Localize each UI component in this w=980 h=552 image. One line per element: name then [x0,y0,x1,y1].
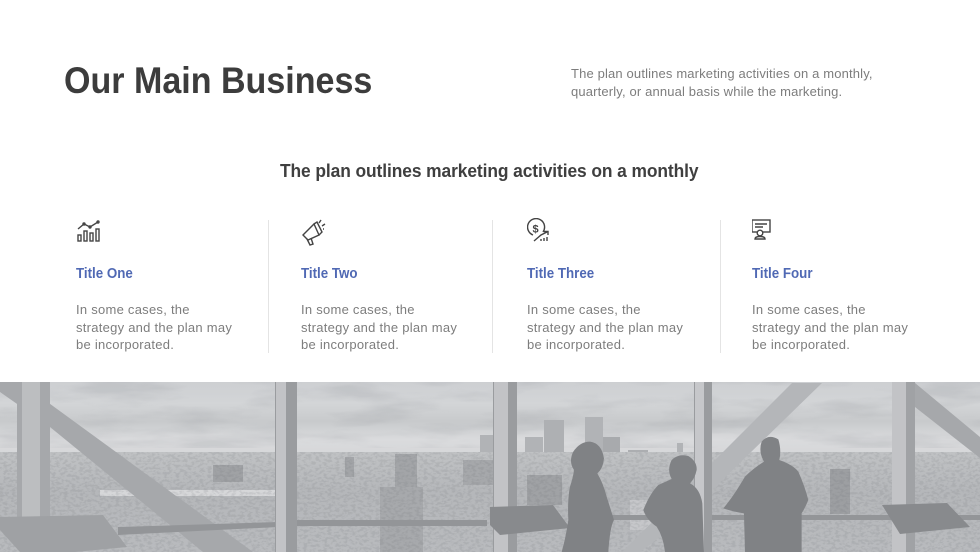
description: title three: strategy and the plan may [527,320,683,334]
man [723,437,808,552]
heading: title four: Title Four [752,266,813,282]
heading: title two: Title Two [301,266,358,282]
description: title one: In some cases, the [76,302,190,317]
description: title four: In some cases, the [752,302,866,317]
kiosk table right [882,503,970,534]
heading: title three: Title Three [527,266,594,282]
description: title three: be incorporated. [527,337,625,352]
icon: megaphone [302,220,326,246]
sky [0,382,980,454]
left diagonal beam [0,382,253,552]
panel: title three [527,218,683,352]
description: title two: In some cases, the [301,302,415,317]
icon: dollar growth: $ [532,224,539,236]
description: title one: be incorporated. [76,337,174,352]
icon: dollar growth [527,218,549,242]
intro text [571,66,873,98]
right diagonal beam [622,383,822,552]
subheading: The plan outlines marketing activities on a monthly [280,160,698,181]
kiosk table left [0,515,127,552]
railing [118,515,980,535]
kiosk table centre [490,505,570,535]
far right diagonal beam [915,383,980,458]
photo: people looking over city skyline [0,382,980,552]
description: title four: be incorporated. [752,337,850,352]
icon: bar chart with trend line [77,220,100,242]
intro text: The plan outlines marketing activities on a monthly, [571,66,873,81]
window posts [17,382,915,552]
woman left [562,442,614,552]
description: title four: strategy and the plan may [752,320,908,334]
heading: title one: Title One [76,266,133,282]
description: title three [527,302,683,352]
description: title two: be incorporated. [301,337,399,352]
description: title one [76,302,232,352]
panel: title one [76,220,232,352]
panel: title four [752,219,908,352]
icon: presenter with board [752,219,771,240]
woman centre [643,455,704,552]
description: title three: In some cases, the [527,302,641,317]
description: title two: strategy and the plan may [301,320,457,334]
description: title two [301,302,457,352]
distant towers [480,417,683,477]
description: title four [752,302,908,352]
description: title one: strategy and the plan may [76,320,232,334]
panel: title two [301,220,457,352]
intro text: quarterly, or annual basis while the marketing. [571,84,842,98]
title: Our Main Business [64,60,372,101]
silhouettes of three people [562,437,808,552]
city [0,452,980,552]
